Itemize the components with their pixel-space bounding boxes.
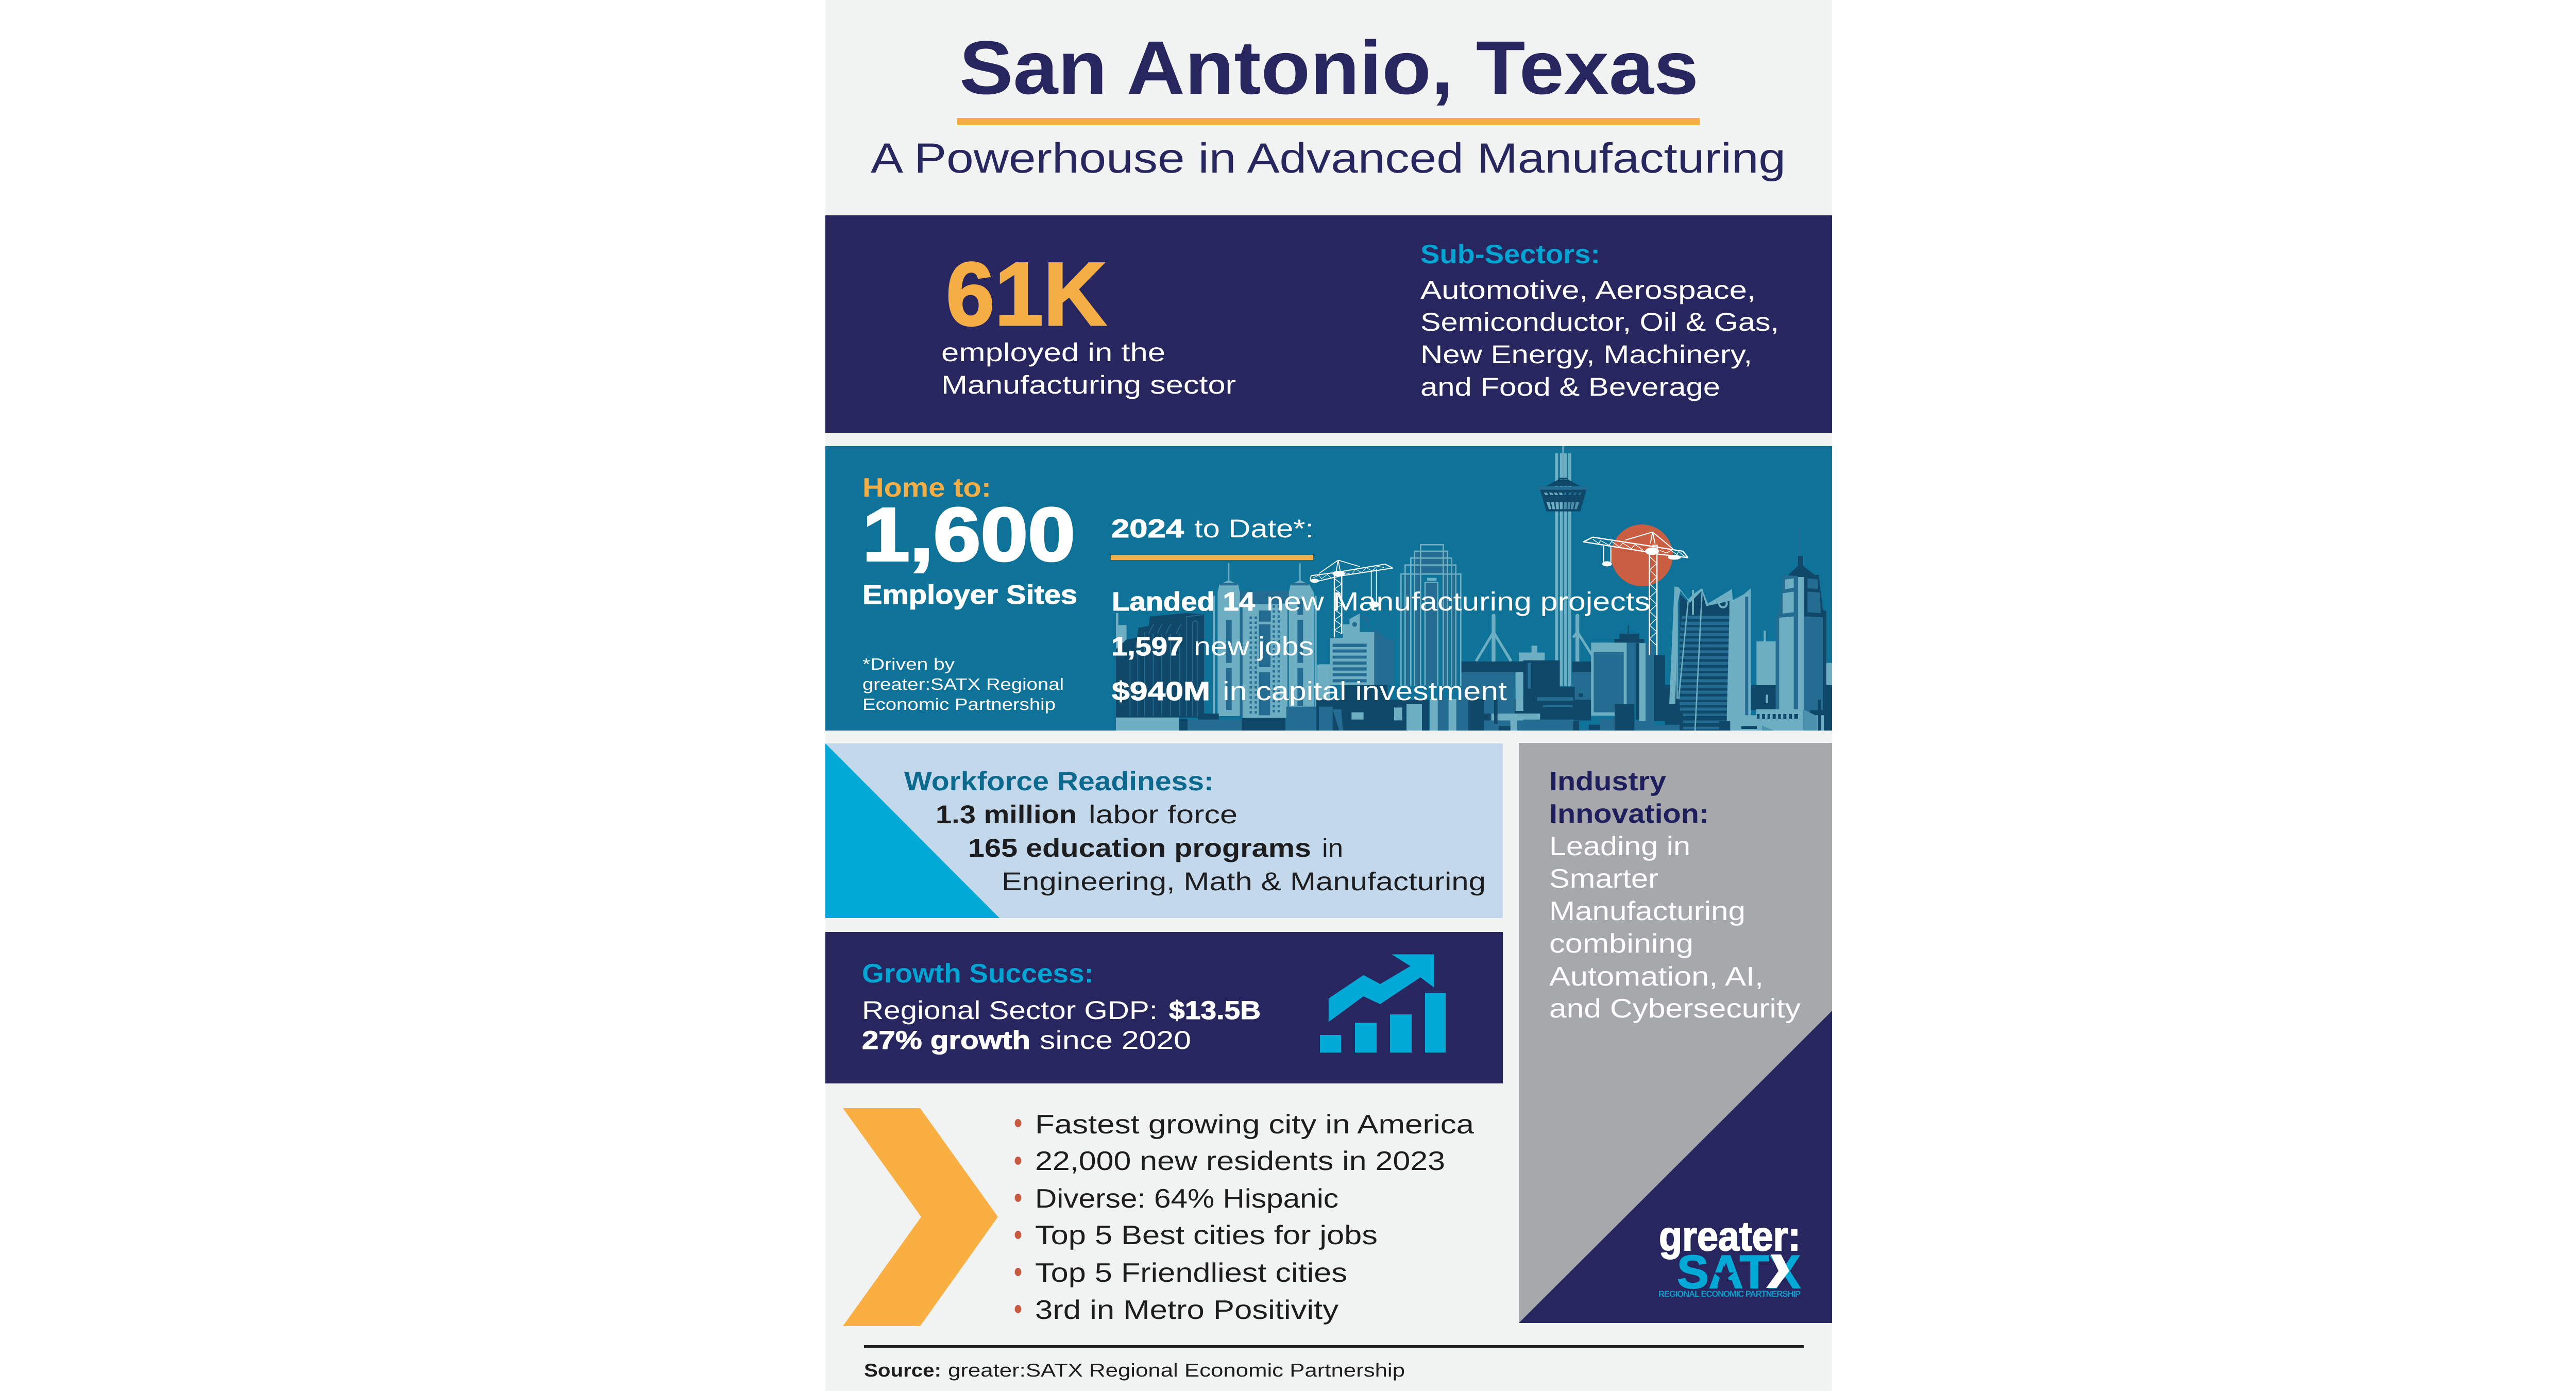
text block: 2024 to date results: in capital investment (1223, 676, 1507, 706)
panel: employment and sub-sectors (825, 215, 1832, 433)
text block: sub-sectors (1420, 240, 1779, 401)
text block: innovation: Smarter (1549, 864, 1658, 894)
footnote: driven by: Economic Partnership (862, 695, 1056, 714)
title underline (957, 118, 1700, 125)
stat: 61K employed: 61K (946, 244, 1107, 345)
text block: innovation: Leading in (1549, 832, 1690, 861)
text block: 2024 to date results: Landed 14 (1112, 587, 1256, 616)
text block: sub-sectors: New Energy, Machinery, (1420, 340, 1752, 369)
text block: innovation: Innovation: (1549, 799, 1709, 829)
illustration: San Antonio skyline with cranes (1116, 446, 1832, 800)
icon: orange chevron (843, 1108, 998, 1326)
header: title block (871, 26, 1786, 182)
logo: greater:SATX: REGIONAL ECONOMIC PARTNERSHIP (1658, 1290, 1801, 1299)
text block: 2024 to date results: $940M (1112, 676, 1210, 706)
text block: sub-sectors: and Food & Beverage (1420, 372, 1720, 401)
text block: 2024 to date results: 1,597 (1111, 632, 1183, 661)
sun (1611, 524, 1673, 586)
text block: sub-sectors: Automotive, Aerospace, (1420, 276, 1756, 304)
text block: innovation: Automation, AI, (1549, 962, 1764, 992)
page background panel (825, 0, 1832, 1391)
source line: Source: (864, 1360, 941, 1381)
text block: 2024 to date results: to Date*: (1194, 514, 1314, 543)
text block: growth: Regional Sector GDP: (862, 996, 1158, 1025)
bullet list: city facts: Fastest growing city in America (1035, 1110, 1474, 1140)
logo: greater:SATX: greater: (1659, 1213, 1801, 1259)
text block: 2024 to date results: new jobs (1194, 632, 1314, 661)
cyan triangle accent (825, 743, 999, 918)
text block: sub-sectors: Sub-Sectors: (1420, 240, 1600, 269)
text block: workforce: Engineering, Math & Manufacturing (1002, 867, 1486, 896)
text block: workforce: 1.3 million (936, 800, 1077, 829)
text block: innovation: and Cybersecurity (1549, 994, 1801, 1024)
source rule (864, 1345, 1804, 1348)
bullet list: city facts (1015, 1110, 1474, 1325)
skyline tower of the americas head (1537, 446, 1588, 512)
text block: growth: 27% growth (862, 1026, 1030, 1055)
bullet list: city facts: Top 5 Best cities for jobs (1035, 1220, 1378, 1250)
navy triangle with logo (1519, 1011, 1832, 1323)
text block: sub-sectors: Semiconductor, Oil & Gas, (1420, 308, 1779, 336)
text block: home to 1,600 employer sites (862, 473, 1077, 610)
stat: 61K employed (941, 244, 1236, 399)
skyline centre section (1319, 545, 1535, 731)
stat: 61K employed: Manufacturing sector (941, 370, 1236, 399)
text block: workforce: labor force (1089, 800, 1238, 829)
text block: workforce: Workforce Readiness: (904, 767, 1214, 796)
source line: greater:SATX Regional Economic Partnership (948, 1360, 1405, 1381)
text block: workforce: 165 education programs (968, 834, 1311, 862)
source line (864, 1360, 1405, 1381)
text block: 2024 to date results: new Manufacturing projects (1266, 587, 1650, 616)
bullet list: city facts: Diverse: 64% Hispanic (1035, 1184, 1338, 1214)
footnote: driven by (862, 655, 1064, 714)
crane: left (1310, 560, 1393, 637)
panel: workforce readiness (825, 743, 1503, 918)
stat: 61K employed: employed in the (941, 338, 1165, 367)
text block: workforce: in (1322, 834, 1343, 862)
text block: 2024 to date results: 2024 (1111, 514, 1184, 543)
bullet list: city facts: 22,000 new residents in 2023 (1035, 1146, 1445, 1176)
text block: innovation: Manufacturing (1549, 896, 1745, 926)
text block: workforce (904, 767, 1486, 896)
footnote: driven by: *Driven by (862, 655, 955, 673)
panel: growth success (825, 932, 1503, 1083)
gold underline (1111, 555, 1313, 560)
subtitle: A Powerhouse in Advanced Manufacturing (871, 135, 1786, 182)
text block: 2024 to date results (1111, 514, 1650, 706)
icon: rising bar chart with arrow (1320, 954, 1446, 1053)
text block: growth (862, 959, 1261, 1055)
panel: industry innovation (1519, 743, 1832, 1323)
text block: home to 1,600 employer sites: 1,600 (862, 493, 1075, 577)
logo: greater:SATX: SATX (1677, 1246, 1801, 1298)
footnote: driven by: greater:SATX Regional (862, 675, 1064, 693)
skyline right-centre section (1484, 453, 1681, 731)
text block: innovation: Industry (1549, 767, 1666, 796)
panel: employer sites and 2024 results (825, 446, 1832, 731)
text block: growth: $13.5B (1169, 996, 1261, 1025)
title: San Antonio, Texas (959, 26, 1699, 110)
text block: home to 1,600 employer sites: Employer Sites (862, 580, 1077, 610)
bullet list: city facts: 3rd in Metro Positivity (1035, 1295, 1338, 1325)
skyline right section (1669, 528, 1832, 731)
skyline left section (1116, 563, 1324, 731)
text block: innovation: combining (1549, 929, 1693, 959)
text block: innovation (1549, 767, 1801, 1024)
logo: greater:SATX (1658, 1213, 1801, 1299)
text block: growth: since 2020 (1040, 1026, 1191, 1055)
crane: right (1583, 532, 1688, 655)
bullet list: city facts: Top 5 Friendliest cities (1035, 1258, 1347, 1288)
text block: growth: Growth Success: (862, 959, 1094, 989)
text block: home to 1,600 employer sites: Home to: (862, 473, 991, 503)
